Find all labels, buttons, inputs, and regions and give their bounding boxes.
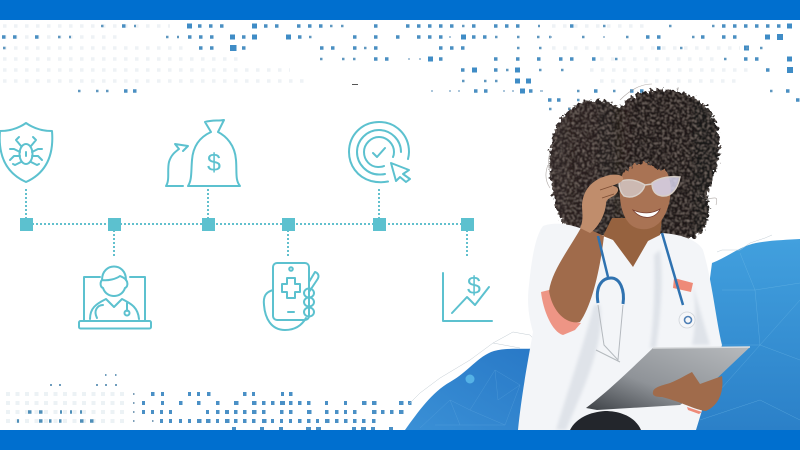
timeline dotted connectors: [26, 189, 467, 258]
icon: target with cursor: [349, 122, 410, 182]
pink pocket: [673, 278, 693, 292]
icon: hand holding phone: [264, 263, 318, 330]
icon: money bags: [166, 120, 240, 186]
timeline nodes: [20, 218, 474, 231]
tablet: [586, 347, 750, 410]
icon: rising revenue chart: [443, 272, 492, 321]
badge: [679, 312, 695, 328]
smile: [633, 209, 660, 217]
pink cuff: [541, 290, 581, 335]
blue wave: left: [405, 332, 540, 430]
flyaway curls: [546, 84, 717, 205]
hand on glasses: [580, 175, 623, 233]
neck: [603, 218, 662, 267]
forearm: [549, 226, 604, 322]
pink cuff lower: [687, 407, 702, 414]
bottom bar: [0, 430, 800, 450]
finger lines: [600, 186, 614, 198]
icon: telehealth doctor on laptop: [79, 266, 151, 328]
stray dash: [352, 84, 358, 86]
hair back: [550, 89, 720, 240]
coat: [518, 224, 722, 430]
glasses: [619, 177, 680, 197]
coat shading: [556, 250, 710, 430]
icon: rising revenue chart: $: [467, 272, 481, 300]
dotted data pattern: top: [2, 26, 800, 109]
icon: shield with bug: [0, 123, 52, 182]
hand under tablet: [653, 372, 722, 411]
face: [620, 156, 671, 229]
blue wave: right: [690, 235, 800, 430]
stethoscope: [596, 233, 683, 362]
fringe: [616, 153, 680, 180]
tablet edge: [653, 347, 750, 348]
timeline: [20, 189, 474, 258]
top bar: [0, 0, 800, 20]
trousers: [570, 411, 641, 430]
dotted data pattern: bottom: [6, 375, 412, 429]
illustration: doctor with tablet: [518, 84, 750, 430]
icon: money bags: $: [207, 149, 221, 177]
